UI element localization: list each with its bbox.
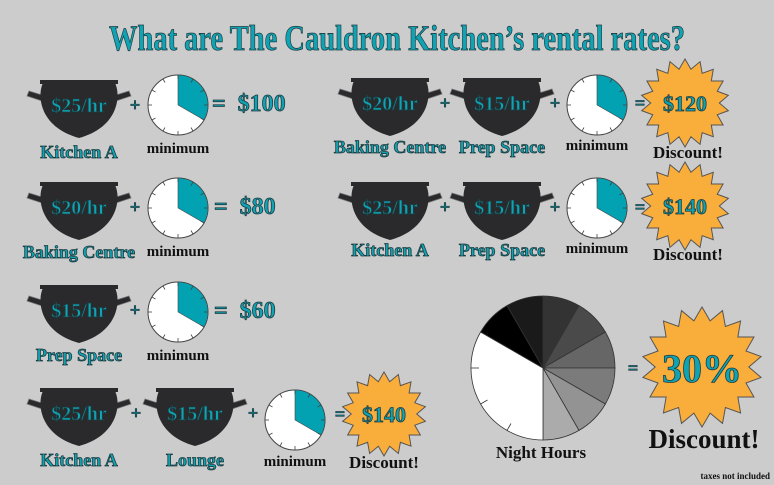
clock: minimum [566,75,629,154]
plus: + [550,197,560,217]
starburst: $120 [642,59,728,147]
label: Baking Centre: Baking Centre [23,242,135,262]
equals: = [635,197,645,217]
starburst: $140: $140 [663,194,707,219]
equals: = [628,358,638,378]
plus: + [130,95,140,115]
label: Kitchen A: Kitchen A [40,450,118,470]
footnote: taxes not included: taxes not included [700,471,770,481]
plus: + [440,197,450,217]
clock: minimum: minimum [147,348,210,364]
pot: Lounge $15/hr: $15/hr [167,403,223,425]
row: Baking Centre + Prep Space $120 [334,59,728,162]
row: Kitchen A $100 [27,75,286,162]
plus: + [130,300,140,320]
pot: Prep Space $15/hr [450,182,554,240]
row: Prep Space $60 [27,282,276,365]
clock: minimum: minimum [566,138,629,154]
equals: = [335,404,345,424]
pot: Prep Space $15/hr: $15/hr [474,197,530,219]
pot: Baking Centre $20/hr [338,78,442,136]
label: Prep Space: Prep Space [459,240,545,260]
pot: Prep Space $15/hr [450,78,554,136]
pot: Baking Centre $20/hr: $20/hr [362,93,418,115]
label: Discount!: Discount! [653,245,723,264]
price: $100: = $100 [212,91,286,117]
starburst: $120: $120 [663,91,707,116]
clock: minimum [147,282,210,364]
plus: + [440,93,450,113]
label: Prep Space: Prep Space [36,345,122,365]
plus: + [130,197,140,217]
clock: minimum [147,178,210,260]
pot: Kitchen A $25/hr: $25/hr [51,403,107,425]
price: $60: = $60 [214,298,276,324]
pot: Prep Space $15/hr [27,285,131,343]
label: Baking Centre: Baking Centre [334,137,446,157]
clock: minimum: minimum [566,241,629,257]
row: Kitchen A + Lounge $140 [27,372,425,472]
plus: + [248,403,258,423]
label: Discount! big: Discount! [648,424,760,454]
pot: Prep Space $15/hr: $15/hr [474,93,530,115]
label: Kitchen A: Kitchen A [351,240,429,260]
pot: Kitchen A $25/hr: $25/hr [51,95,107,117]
label: Prep Space: Prep Space [459,137,545,157]
clock: minimum: minimum [264,454,327,470]
starburst: $140: $140 [362,402,406,427]
pot: Kitchen A $25/hr [27,80,131,138]
label: Lounge: Lounge [166,450,224,470]
clock: minimum [147,75,210,157]
clock: minimum [264,390,327,470]
pot: Baking Centre $20/hr: $20/hr [51,197,107,219]
pot: Lounge $15/hr [143,388,247,446]
clock: minimum: minimum [147,244,210,260]
starburst: 30% discount: 30% [662,346,742,391]
starburst: 30% discount [643,307,761,427]
price: $80: = $80 [214,194,276,220]
label: Kitchen A: Kitchen A [40,142,118,162]
row: Kitchen A + Prep Space $140 [338,162,728,264]
pot: Kitchen A $25/hr [27,388,131,446]
row: Baking Centre $80 [23,178,276,262]
pot: Baking Centre $20/hr [27,182,131,240]
pot: Kitchen A $25/hr: $25/hr [362,197,418,219]
clock: minimum [566,178,629,257]
plus: + [550,93,560,113]
pot: Prep Space $15/hr: $15/hr [51,300,107,322]
equals: = [635,93,645,113]
pie chart: night hours [471,296,615,462]
clock: minimum: minimum [147,141,210,157]
plus: + [131,403,141,423]
label: Night Hours: Night Hours [496,443,586,462]
starburst: $140 [343,372,425,456]
label: Discount!: Discount! [653,143,723,162]
pot: Kitchen A $25/hr [338,182,442,240]
label: Discount!: Discount! [349,453,419,472]
starburst: $140 [642,162,728,250]
